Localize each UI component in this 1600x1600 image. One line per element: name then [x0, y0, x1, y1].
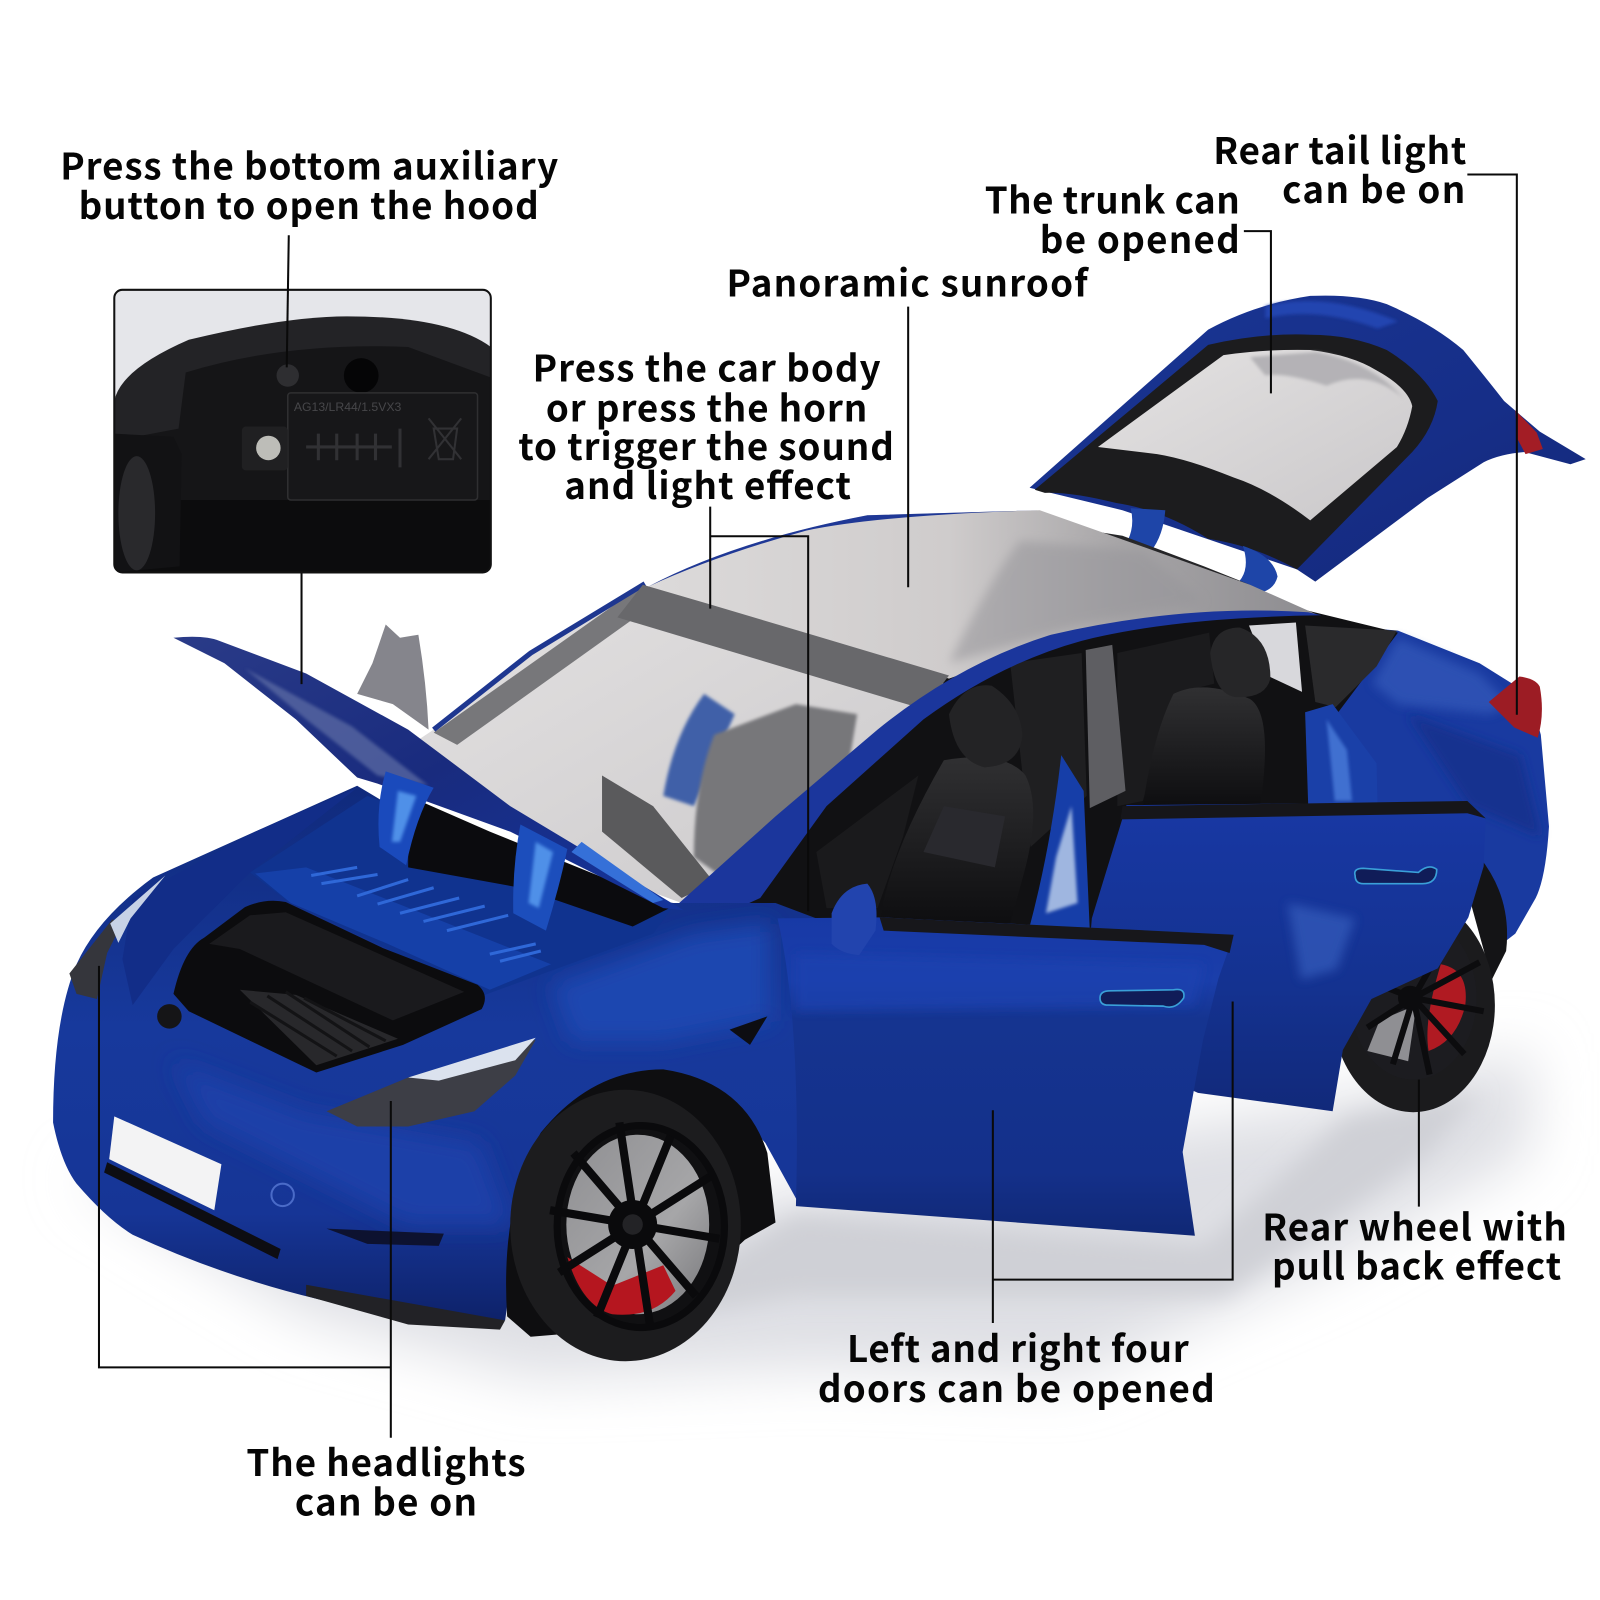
trunk glass	[1098, 350, 1412, 520]
lower trunk lip	[1024, 520, 1265, 594]
far door through glass	[663, 694, 735, 806]
car: front wheel	[510, 1090, 741, 1361]
seat far window area	[1010, 653, 1087, 847]
car: far side mirror and door	[357, 624, 429, 730]
label: doors	[818, 1319, 1215, 1413]
label: trunk: The trunk can	[985, 170, 1240, 224]
windshield frit band	[434, 585, 643, 745]
car: licence plate	[109, 1116, 221, 1210]
car: cowl and vents	[250, 796, 673, 995]
label: rear wheel: pull back effect	[1272, 1237, 1561, 1291]
door jamb	[1305, 704, 1378, 806]
rear quarter window	[1305, 626, 1397, 707]
label: sound and light: or press the horn	[546, 378, 867, 432]
front headrest	[949, 685, 1022, 767]
label: tail light: can be on	[1282, 160, 1465, 214]
car: rear door	[1082, 801, 1486, 1111]
rear headrest	[1210, 628, 1270, 697]
brake caliper	[567, 1257, 676, 1315]
dashboard	[816, 776, 918, 908]
bumper highlight	[173, 1061, 510, 1224]
car: roof header bar	[617, 585, 949, 709]
trunk hinges	[1114, 508, 1278, 594]
car: tail light	[1489, 677, 1542, 738]
car: rear body	[1306, 622, 1549, 947]
hood struts	[378, 771, 434, 865]
label: hood button	[60, 137, 558, 230]
leader lines	[99, 174, 1517, 1438]
seat through glass	[694, 704, 857, 893]
car: parking sensor	[271, 1184, 294, 1206]
label: sunroof: Panoramic sunroof	[727, 253, 1089, 307]
screw	[256, 436, 281, 460]
car: panoramic roof glass	[648, 510, 1316, 679]
label: trunk	[985, 170, 1240, 264]
front door handle	[1100, 989, 1184, 1007]
A-pillar far side	[434, 584, 645, 730]
plate text: AG13/LR44/1.5VX3	[294, 400, 402, 414]
B-pillar	[1086, 645, 1126, 808]
label: tail light: Rear tail light	[1213, 121, 1466, 175]
trunk reflection	[1250, 352, 1403, 398]
front seat back	[880, 757, 1033, 923]
car: windshield	[403, 584, 944, 903]
label: rear wheel	[1262, 1197, 1567, 1291]
label plate	[288, 393, 478, 500]
tyre inside inset	[116, 434, 156, 570]
car: frunk	[173, 901, 485, 1072]
label: doors: Left and right four	[847, 1319, 1190, 1373]
label: headlights: can be on	[295, 1472, 477, 1526]
left fender	[122, 788, 357, 1005]
car: hood release knob	[157, 1004, 182, 1029]
label: headlights: The headlights	[246, 1433, 526, 1487]
ground shadow	[71, 1051, 1531, 1378]
label: sound and light	[518, 339, 894, 510]
car: lower grille	[104, 1162, 281, 1259]
front door seal	[880, 917, 1234, 953]
rear door handle	[1355, 867, 1437, 884]
car: side mirror	[832, 884, 877, 955]
recycle symbol	[429, 418, 461, 459]
label: sound and light: to trigger the sound	[518, 417, 894, 471]
label: hood button: Press the bottom auxiliary	[60, 137, 558, 191]
car: fog slot	[327, 1229, 444, 1246]
car: left headlight	[69, 876, 165, 999]
trunk tail light	[1515, 410, 1543, 454]
car: bumper lip	[306, 1285, 505, 1330]
slide switch	[242, 427, 288, 470]
inset photo: hood button	[114, 290, 491, 572]
label: sound and light: Press the car body	[533, 339, 881, 393]
button	[277, 364, 299, 387]
car: front wheel arch	[506, 1069, 776, 1337]
label: doors: doors can be opened	[818, 1359, 1215, 1413]
battery symbol	[306, 429, 400, 467]
car: front door	[778, 917, 1234, 1236]
trunk window frame	[1035, 334, 1438, 569]
car: front body	[53, 786, 816, 1320]
label: hood button: button to open the hood	[79, 176, 539, 230]
car: open hood	[173, 637, 684, 931]
rear seat	[1117, 633, 1214, 806]
label: rear wheel: Rear wheel with	[1262, 1197, 1567, 1251]
fender highlight	[551, 923, 770, 1041]
car: right headlight	[327, 1038, 536, 1127]
dashboard through glass	[602, 776, 714, 898]
hole	[344, 358, 379, 393]
car: side marker	[730, 1016, 767, 1045]
car: interior cabin	[714, 610, 1398, 939]
label: tail light	[1213, 121, 1466, 214]
label: trunk: be opened	[1040, 210, 1240, 264]
car: A-pillar and roof rail	[673, 611, 1321, 923]
rear door seal	[1120, 801, 1486, 819]
car: open trunk lid	[1024, 296, 1586, 594]
label: sound and light: and light effect	[564, 456, 851, 510]
wheel spokes	[550, 1122, 719, 1326]
door pillar	[1029, 755, 1090, 931]
car: rear wheel	[1332, 857, 1507, 1112]
label: headlights	[246, 1433, 526, 1526]
